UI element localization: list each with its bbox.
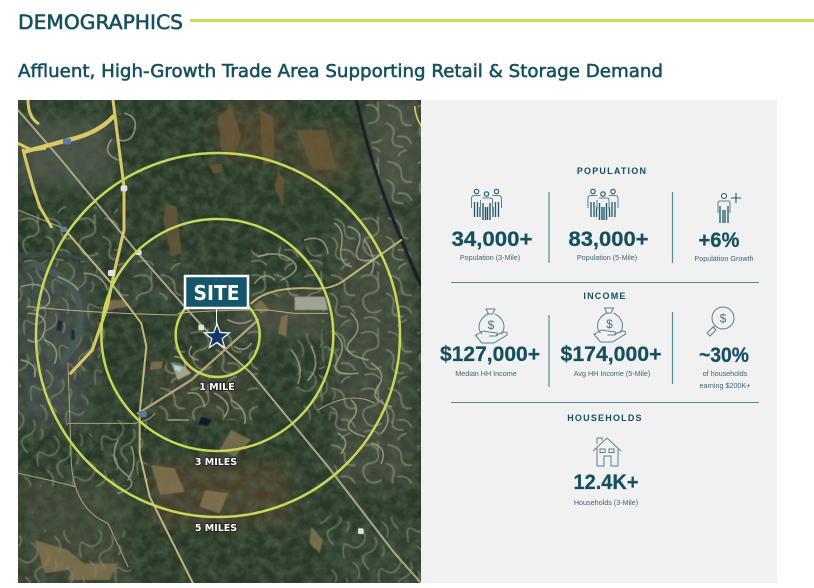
icon: person plus [718, 193, 741, 223]
site marker [185, 276, 248, 348]
panel: stats background [421, 100, 777, 583]
panel: aerial map [18, 100, 422, 583]
texture [18, 100, 422, 583]
heading: population: POPULATION [577, 166, 647, 176]
icon: money bag [476, 309, 507, 343]
divider [672, 312, 674, 384]
stat: $127,000+ [440, 342, 540, 378]
stat: 83,000+: Population (5-Mile) [577, 253, 637, 262]
highway shields [61, 138, 364, 534]
water channels [356, 100, 422, 287]
icon: people 3-mile [472, 189, 502, 220]
stat: 34,000+: Population (3-Mile) [460, 253, 520, 262]
stat: 34,000+: 34,000+ [452, 227, 532, 251]
stat: +6% [694, 228, 754, 263]
divider [548, 315, 550, 387]
highways [18, 100, 422, 583]
stat: ~30%: ~30% [699, 343, 749, 367]
section title: DEMOGRAPHICS [18, 11, 183, 34]
label: 5 miles: 5 MILES [195, 523, 237, 534]
stat: 83,000+: 83,000+ [568, 227, 648, 251]
stat: $127,000+: $127,000+ [440, 342, 540, 366]
label: 3 miles: 3 MILES [195, 457, 237, 468]
stat: +6%: +6% [698, 228, 740, 252]
stat: +6%: Population Growth [694, 254, 754, 263]
stat: 83,000+ [568, 227, 648, 262]
stat: ~30%: of households [703, 369, 748, 378]
title rule [190, 19, 814, 22]
stat: 12.4K+: Households (3-Mile) [574, 498, 638, 507]
icon: magnifier dollar: $ [720, 312, 727, 326]
stat: $174,000+: Avg HH Income (5-Mile) [574, 369, 650, 378]
divider [548, 192, 550, 263]
heading: households: HOUSEHOLDS [567, 413, 643, 423]
icon: people 5-mile [588, 189, 618, 220]
residential street texture [18, 100, 422, 583]
brown marsh patches [163, 107, 336, 257]
stat: 12.4K+: 12.4K+ [574, 470, 638, 494]
site marker: SITE [194, 281, 240, 305]
tan local roads [18, 210, 401, 567]
section title [18, 11, 814, 34]
stat: $174,000+ [560, 342, 662, 378]
stat: 34,000+ [452, 227, 532, 262]
icon: magnifier dollar [707, 307, 734, 336]
stat: $174,000+: $174,000+ [560, 342, 662, 366]
heading: income: INCOME [583, 291, 627, 301]
residential streets [21, 113, 391, 493]
radius rings [36, 153, 400, 517]
icon: money bag [594, 308, 626, 342]
divider [672, 192, 674, 263]
stat: $127,000+: Median HH Income [455, 369, 517, 378]
icon: house [593, 438, 621, 466]
stat: ~30%: earning $200K+ [700, 381, 750, 390]
label: 1 mile: 1 MILE [199, 382, 235, 393]
stat: ~30% [699, 343, 750, 390]
subtitle: Affluent, High-Growth Trade Area Supporting Retail & Storage Demand [18, 61, 663, 82]
stat: 12.4K+ [574, 470, 638, 507]
